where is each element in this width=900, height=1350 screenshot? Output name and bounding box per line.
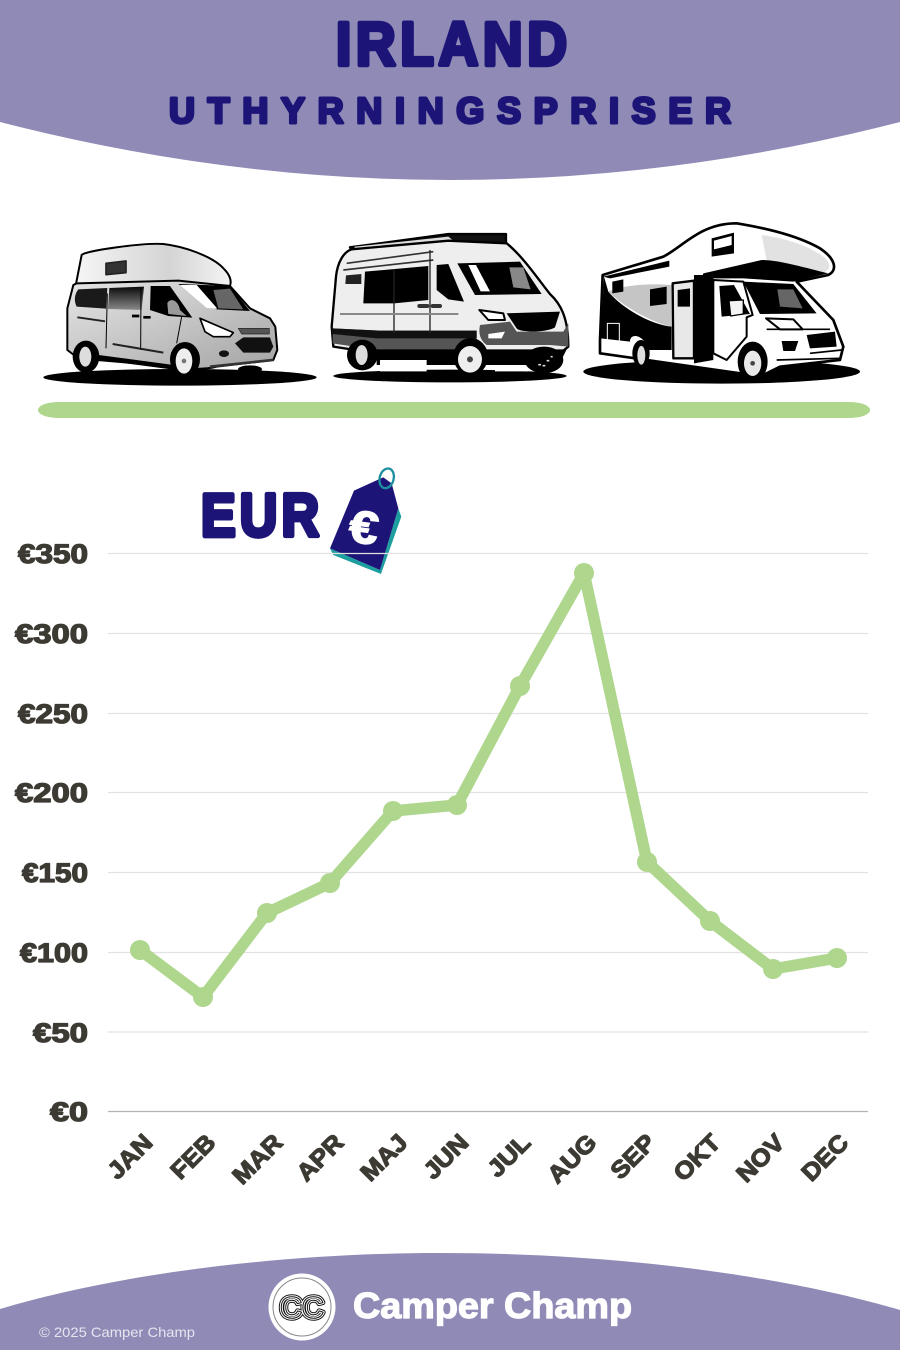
x axis labels: SEP [605,1129,661,1185]
y axis labels: €100 [20,938,88,968]
header banner [0,0,900,180]
line chart: monthly rental prices [15,539,868,1190]
y axis labels: €50 [33,1018,88,1048]
copyright: © 2025 Camper Champ [39,1324,195,1340]
x axis labels: AUG [542,1129,602,1189]
EUR text: EUR [201,481,319,549]
currency label [201,467,401,574]
data points [130,563,847,1007]
grid lines [108,554,868,1032]
logo: CC [280,1290,324,1325]
x axis labels: JUL [482,1129,536,1183]
green divider bar [38,402,870,418]
icon: euro price tag: € [346,501,382,555]
y axis labels: €350 [18,539,88,569]
x axis labels: OKT [668,1129,726,1187]
logo: CC [280,1290,324,1325]
x axis labels: JAN [102,1129,158,1185]
logo [268,1274,336,1340]
y axis labels: €250 [18,699,88,729]
subtitle: UTHYRNINGSPRISER [169,90,731,131]
x axis labels: FEB [165,1129,221,1185]
x axis labels: APR [291,1129,349,1187]
brand name: Camper Champ [353,1285,632,1326]
data line [140,573,837,997]
icon: euro price tag [330,467,401,574]
x axis labels: DEC [796,1129,854,1187]
footer banner [0,1253,900,1350]
y axis labels: €300 [15,619,88,649]
x axis labels: MAJ [355,1129,413,1187]
x axis labels: NOV [731,1129,790,1188]
x axis labels [102,1129,854,1190]
title: IRLAND [336,10,567,79]
y axis labels [15,539,88,1127]
icon: large motorhome [583,223,860,384]
x axis labels: MAR [227,1129,288,1190]
logo: CC [280,1290,324,1325]
y axis labels: €0 [50,1097,88,1127]
y axis labels: €150 [22,858,88,888]
y axis labels: €200 [15,778,88,808]
icon: small high-top camper van [43,244,317,386]
x axis labels: JUN [418,1129,474,1185]
icon: medium panel van [332,234,568,382]
